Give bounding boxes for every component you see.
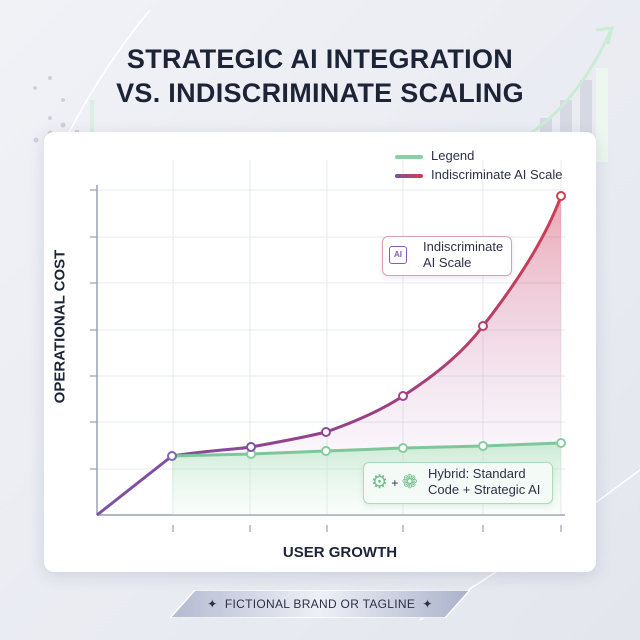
callout: hybrid: Hybrid: Standard bbox=[428, 466, 526, 481]
panel: chart card bbox=[44, 132, 596, 572]
legend: Indiscriminate AI Scale bbox=[431, 167, 563, 182]
title bbox=[116, 44, 524, 108]
callout: indiscriminate AI scale: Indiscriminate bbox=[423, 239, 503, 254]
callout: hybrid: Code + Strategic AI bbox=[428, 482, 540, 497]
x-axis label: USER GROWTH bbox=[283, 544, 397, 561]
icon: AI chip bbox=[389, 246, 407, 264]
title: VS. INDISCRIMINATE SCALING bbox=[116, 78, 524, 108]
banner: tagline: ✦ FICTIONAL BRAND OR TAGLINE ✦ bbox=[207, 597, 433, 611]
legend bbox=[395, 148, 563, 182]
callout: indiscriminate AI scale: AI Scale bbox=[423, 255, 471, 270]
axes bbox=[90, 185, 565, 532]
banner: tagline bbox=[170, 590, 470, 618]
y-axis label: OPERATIONAL COST bbox=[52, 250, 68, 403]
series: hybrid bbox=[172, 443, 561, 456]
title: STRATEGIC AI INTEGRATION bbox=[127, 44, 513, 74]
legend: Legend bbox=[431, 148, 474, 163]
callout: hybrid bbox=[363, 462, 553, 504]
icon: gear plus brain: ⚙ + ❁ bbox=[371, 472, 418, 493]
area fills bbox=[172, 196, 561, 456]
series: indiscriminate AI bbox=[97, 196, 561, 515]
callout: indiscriminate AI scale bbox=[382, 236, 512, 276]
icon: AI chip: AI bbox=[394, 250, 402, 259]
